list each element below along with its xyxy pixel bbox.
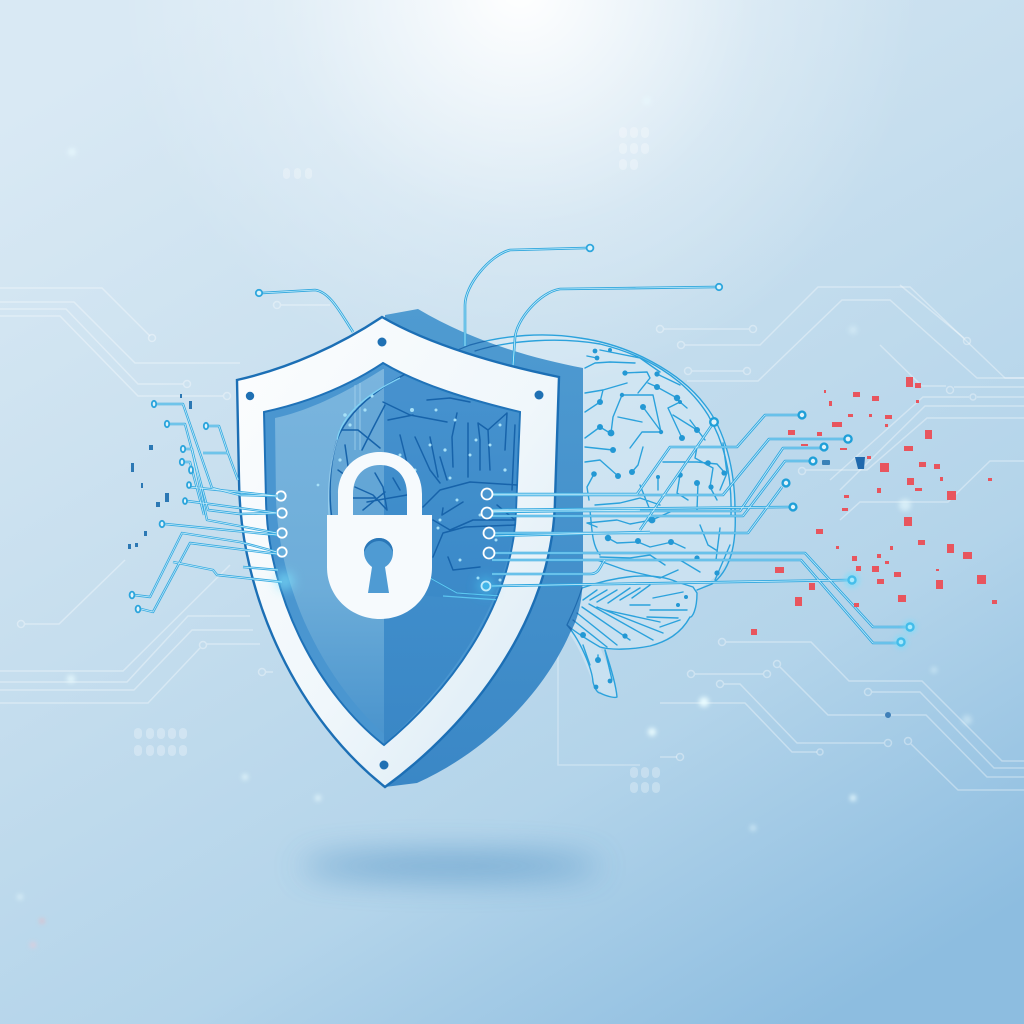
ground shadow [300, 854, 600, 878]
blue inner panel [264, 363, 520, 745]
faint circuit traces: right bottom [558, 638, 1024, 790]
glow at right contact [478, 578, 494, 594]
faint circuit traces: left [0, 288, 330, 703]
glowing sparkles [17, 97, 972, 948]
blue data fragments right [822, 457, 891, 718]
shield contact rings [276, 488, 494, 590]
right wires through shield [492, 415, 905, 643]
brain seen through panel [316, 374, 517, 600]
lock shackle [338, 452, 422, 520]
left wire end nodes [130, 401, 208, 612]
brain wireframe [330, 335, 735, 697]
right wire end nodes [710, 412, 914, 646]
padlock [327, 452, 432, 619]
keyhole [364, 538, 393, 593]
panel inner-left brain edge [329, 440, 337, 545]
lock body [327, 515, 432, 619]
decorative data dots [134, 127, 660, 793]
white frame [237, 317, 559, 787]
red threat particles [751, 377, 997, 635]
right wire node glows [844, 572, 917, 649]
light vertical reflection strip [355, 383, 360, 450]
faint circuit traces: right top [656, 285, 1024, 520]
left wires [134, 404, 282, 612]
blue data fragments left [128, 394, 192, 549]
screws [246, 338, 544, 770]
shield 3D side wall [385, 309, 583, 787]
top connector wires [256, 245, 722, 366]
contact glow [277, 573, 293, 589]
shield front [236, 316, 560, 788]
